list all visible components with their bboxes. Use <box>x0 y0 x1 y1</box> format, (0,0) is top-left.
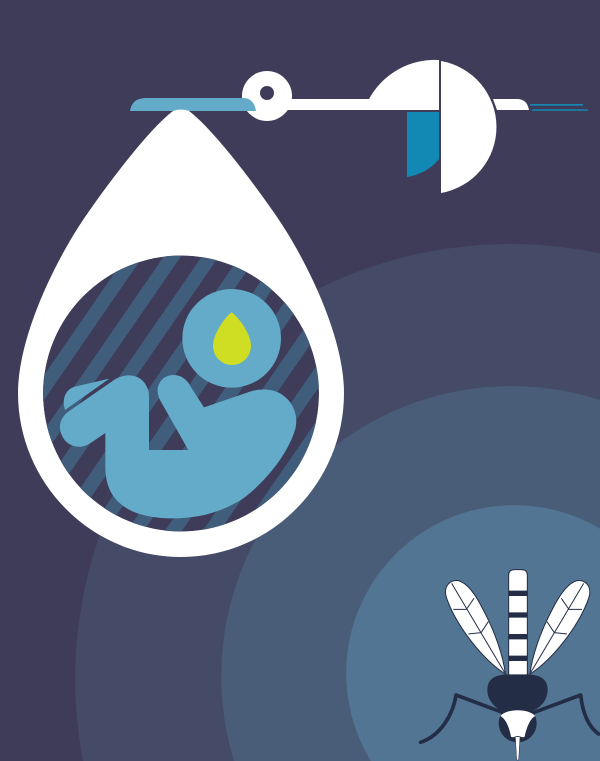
mosquito abdomen <box>509 570 527 675</box>
stork tail <box>493 99 529 110</box>
stork eye <box>260 86 274 100</box>
baby head <box>182 289 281 388</box>
mosquito thorax <box>487 674 548 714</box>
stork neck and upper body <box>285 60 439 110</box>
mosquito proboscis <box>515 737 520 760</box>
yellow drop on head <box>213 312 251 365</box>
mosquito left wing <box>446 581 505 674</box>
stork beak <box>130 98 256 111</box>
mosquito face <box>500 710 535 737</box>
womb circle with stripes <box>43 256 319 532</box>
stork head <box>242 71 292 121</box>
stork legs <box>530 105 588 110</box>
stork <box>130 60 588 193</box>
mosquito head <box>499 704 537 742</box>
baby foot <box>64 379 109 410</box>
stork blue wing feather <box>407 112 439 177</box>
white drop bundle <box>18 110 344 557</box>
baby <box>60 289 296 518</box>
concentric target circles <box>75 244 600 761</box>
mosquito right wing <box>530 581 590 674</box>
stork wing <box>441 61 496 193</box>
baby body <box>60 375 296 518</box>
mosquito legs <box>421 695 599 742</box>
mosquito <box>421 570 599 760</box>
